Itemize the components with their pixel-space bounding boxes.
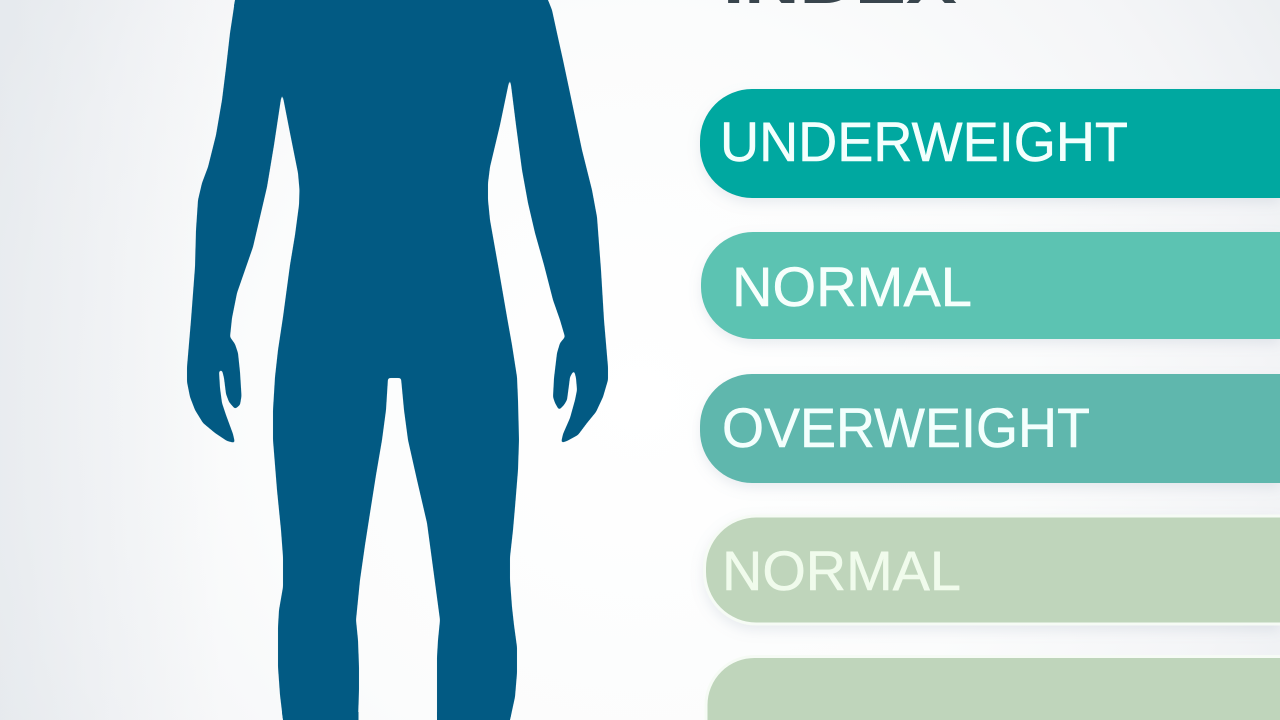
label: overweight: OVERWEIGHT [722,396,1090,459]
category bar: normal, pale [704,516,1280,624]
category bar: unlabelled, pale [706,656,1280,720]
human body silhouette [187,0,608,720]
label: normal: NORMAL [732,255,972,318]
category bar: overweight [700,374,1280,483]
label: normal, pale: NORMAL [722,539,961,602]
label: underweight: UNDERWEIGHT [720,110,1128,173]
category bar: normal [701,232,1280,339]
category bar: underweight [700,89,1280,198]
